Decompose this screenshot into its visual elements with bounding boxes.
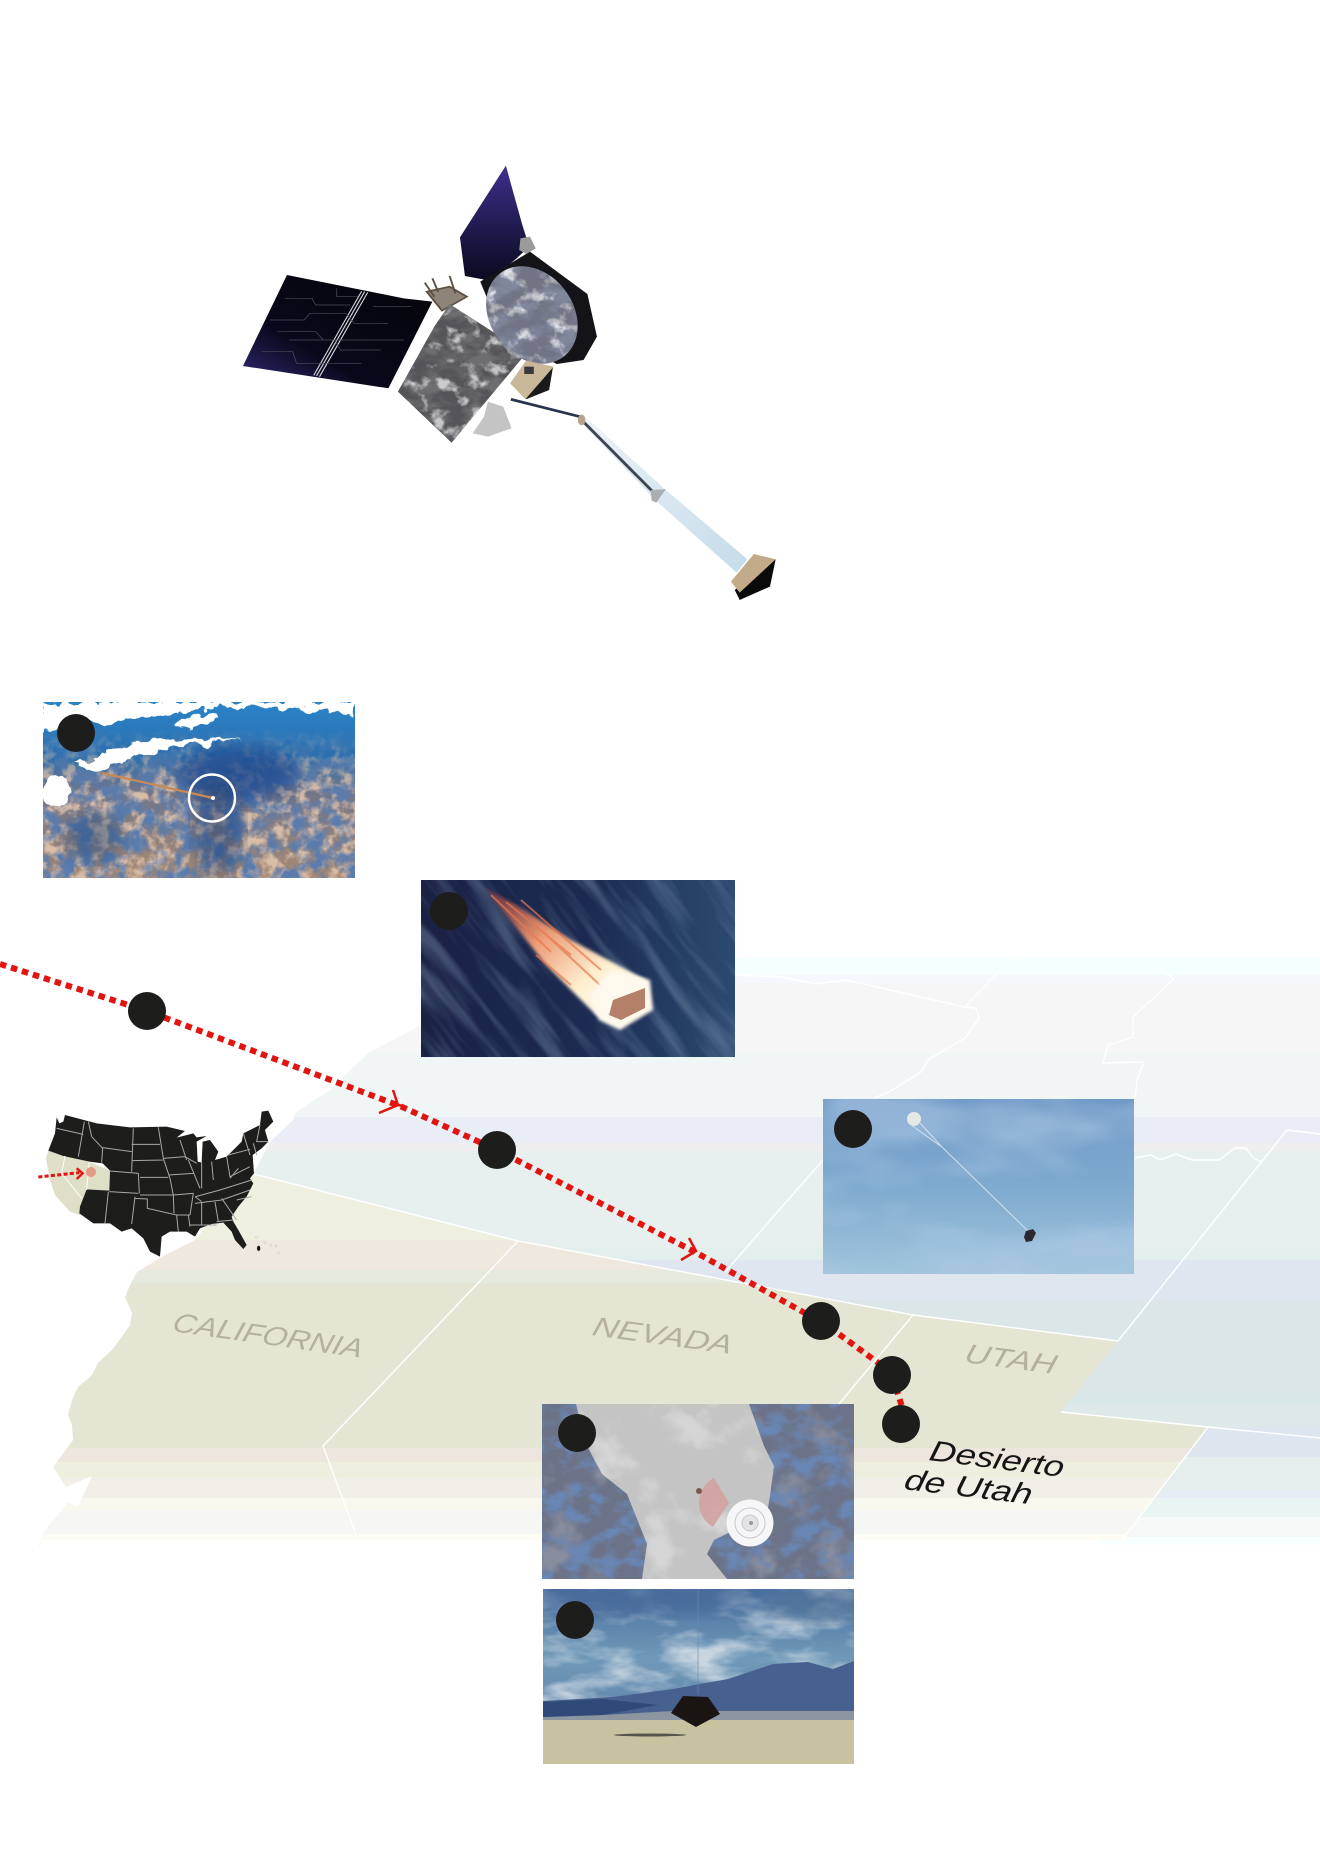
state label: Nevada: NEVADA	[589, 1311, 737, 1360]
state lines	[57, 1122, 268, 1232]
distant haze strip	[543, 1711, 854, 1720]
capsule dot	[696, 1488, 702, 1494]
place label: Utah desert: de Utah	[901, 1464, 1036, 1511]
fireball trail	[102, 773, 213, 798]
spacecraft illustration	[243, 166, 776, 600]
borders of highlighted states	[62, 1156, 89, 1198]
capsule	[671, 1696, 720, 1727]
cloud texture	[823, 1099, 1134, 1274]
mountain texture	[542, 1404, 854, 1579]
salt flat	[576, 1404, 774, 1579]
left solar panel	[243, 275, 432, 388]
parachute lines	[911, 1123, 1028, 1231]
Caribbean islands	[256, 1236, 279, 1254]
spacecraft body	[398, 304, 522, 442]
photo panel: capsule re-entry fireball	[421, 880, 735, 1057]
fire tail	[485, 888, 646, 1027]
contiguous states silhouette	[48, 1111, 273, 1257]
sample return capsule on deck	[510, 361, 554, 399]
parachute	[907, 1112, 921, 1126]
highlight ring	[189, 774, 235, 822]
marker: trajectory point 1	[128, 992, 166, 1030]
upper solar panel	[460, 166, 529, 281]
boom arm	[511, 399, 747, 573]
step marker on fireball photo	[430, 892, 468, 930]
fireball flash	[211, 796, 215, 800]
marker: trajectory point 3	[802, 1302, 840, 1340]
main parachute	[726, 1500, 774, 1546]
place label: Utah desert	[901, 1434, 1068, 1511]
red dotted re-entry trajectory	[0, 964, 903, 1410]
map of the western United States	[0, 957, 1320, 1551]
tether line	[698, 1589, 699, 1695]
arrow: trajectory direction 1	[379, 1090, 403, 1113]
capsule shadow	[614, 1734, 686, 1736]
state border lines	[254, 957, 1320, 1540]
antenna mast	[425, 276, 467, 311]
step marker on aerial photo	[558, 1414, 596, 1452]
photo panel: parachute in sky	[823, 1099, 1134, 1274]
state label: California: CALIFORNIA	[169, 1308, 367, 1364]
step marker on parachute photo	[834, 1110, 872, 1148]
place label: Utah desert: Desierto	[927, 1434, 1068, 1483]
lower instrument	[473, 402, 512, 437]
terrain texture	[43, 732, 355, 878]
photo panel: aerial view of the Utah desert	[542, 1404, 854, 1579]
pacific-side and eastern bands	[254, 957, 1320, 1517]
panel mechanism	[519, 237, 536, 254]
arrow: trajectory direction 2	[681, 1238, 696, 1260]
highlighted western states	[46, 1151, 110, 1215]
capsule	[1024, 1229, 1036, 1242]
photo panel: capsule landing	[543, 1589, 854, 1764]
dish back	[480, 252, 597, 364]
step marker on landing photo	[556, 1601, 594, 1639]
capsule at end of arm	[731, 554, 776, 600]
marker: trajectory point 4	[873, 1356, 911, 1394]
capsule head	[589, 970, 653, 1030]
high gain dish	[486, 266, 578, 364]
marker: trajectory point 5	[882, 1405, 920, 1443]
step marker on Earth photo	[57, 714, 95, 752]
mountains	[543, 1661, 854, 1717]
drogue parachute fan	[699, 1478, 729, 1527]
landing zone marker	[86, 1167, 96, 1177]
marker: trajectory point 2	[478, 1131, 516, 1169]
clouds	[543, 1589, 854, 1701]
inset arrow	[38, 1168, 83, 1179]
land bands: California, Nevada, Utah	[38, 1174, 1206, 1550]
photo panel: Earth view from orbit	[43, 702, 355, 878]
dry lake ground	[543, 1720, 854, 1764]
state label: Utah: UTAH	[961, 1338, 1061, 1380]
inset map of the United States	[38, 1111, 279, 1257]
streak texture	[421, 880, 735, 1057]
clouds	[43, 702, 355, 808]
